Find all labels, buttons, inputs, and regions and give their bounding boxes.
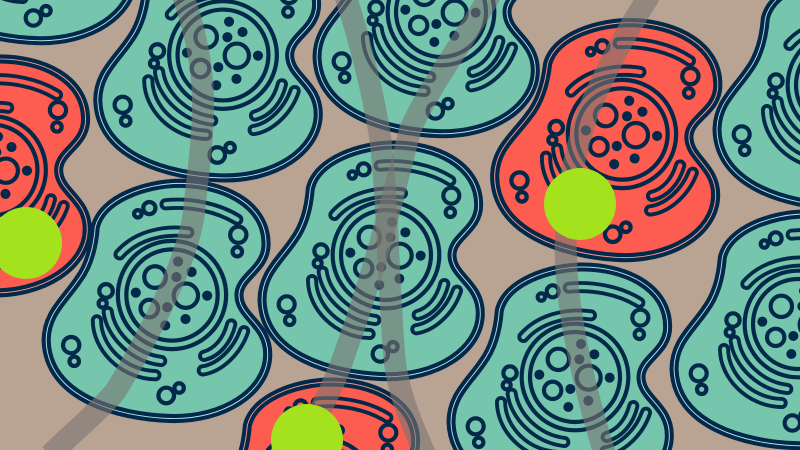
band: left vessel	[50, 0, 203, 450]
marker: green circle bottom	[271, 404, 343, 450]
cell: lower right teal	[451, 267, 669, 450]
marker: green circle left	[0, 207, 62, 279]
band: right vessel	[566, 0, 650, 450]
cell: top left teal	[0, 0, 133, 41]
cell: upper left teal	[98, 0, 318, 178]
cell: centre teal	[262, 145, 480, 377]
cell: upper right teal	[717, 0, 800, 207]
cell: upper right red	[492, 18, 722, 261]
cell: left red	[0, 59, 87, 293]
cell: lower left teal	[46, 183, 268, 419]
band: centre vessel descending right	[345, 0, 425, 450]
band: centre vessel descending left	[300, 0, 490, 450]
cell: bottom centre red	[199, 382, 417, 450]
marker: green circle right	[544, 168, 616, 240]
cell: top centre teal	[317, 0, 535, 134]
cell: far right lower teal	[674, 214, 800, 446]
